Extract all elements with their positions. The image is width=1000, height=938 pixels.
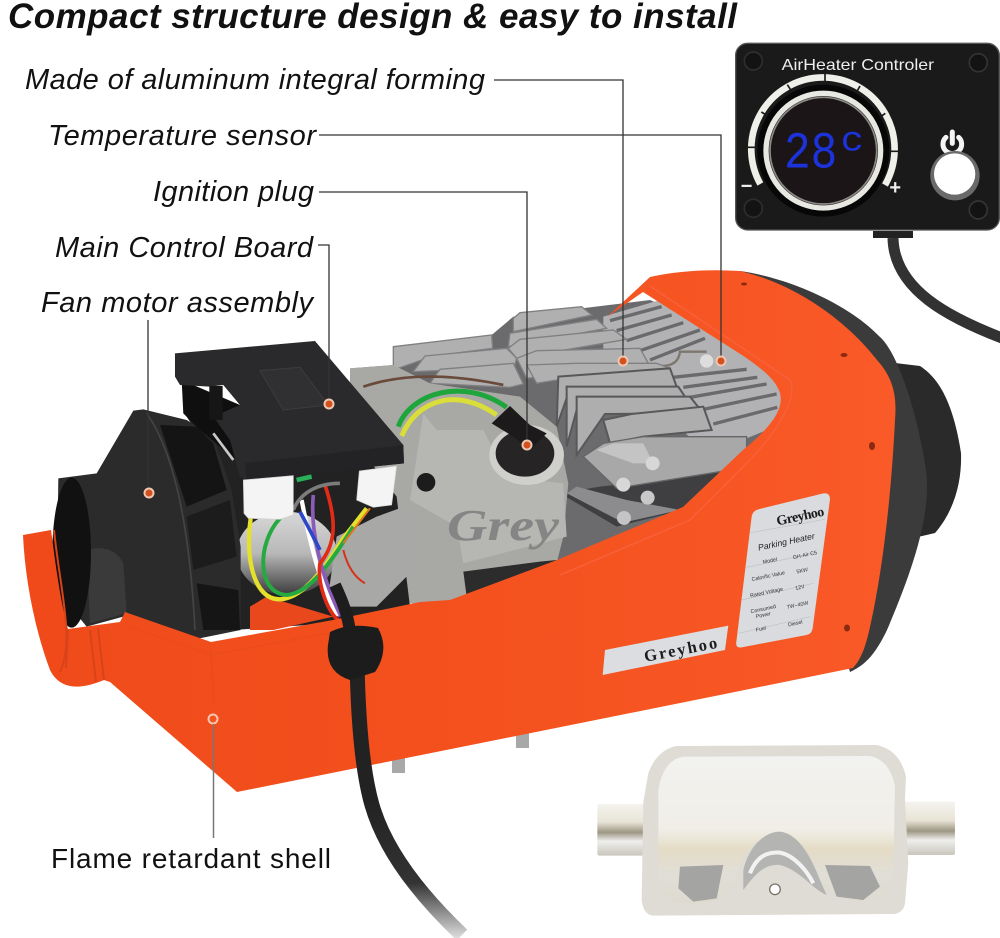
controller panel xyxy=(736,43,999,230)
rating sticker xyxy=(736,493,830,647)
sticker specification text: 5KW xyxy=(796,567,810,575)
dial with temperature display xyxy=(757,85,889,217)
control board cover xyxy=(175,341,404,480)
callout: flame retardant shell xyxy=(51,714,331,874)
sticker specification text: Rated Voltage xyxy=(750,587,784,599)
callout: flame retardant shell: Flame retardant shell xyxy=(51,843,331,874)
opening lip xyxy=(560,286,792,575)
sticker specification text: Diesel xyxy=(788,620,803,628)
minus and plus marks: + xyxy=(889,177,901,199)
engine block xyxy=(350,300,783,603)
sticker specification text: Calorific Value xyxy=(751,570,786,583)
sticker specification text: Parking Heater xyxy=(757,531,817,553)
orange inner shell xyxy=(250,597,333,630)
brand sticker xyxy=(603,626,728,675)
orange flame retardant shell xyxy=(23,270,895,792)
lower motor mount xyxy=(463,560,557,597)
muffler pipes xyxy=(597,802,955,856)
muffler body xyxy=(642,745,908,916)
minus and plus marks: − xyxy=(741,175,752,197)
fan motor housing xyxy=(52,409,241,638)
sticker specification text: Fuel xyxy=(755,626,767,634)
die-cast housing xyxy=(350,365,568,603)
sticker brand: Greyhoo xyxy=(775,505,826,529)
shell holes xyxy=(741,282,875,632)
heater rear outlet xyxy=(895,363,961,540)
shell ridges xyxy=(66,628,104,682)
nozzle ring inner xyxy=(54,530,66,672)
callout: aluminum forming: Made of aluminum integral forming xyxy=(25,64,485,96)
front heat-sink fins xyxy=(557,368,712,455)
mounting hole xyxy=(770,884,780,895)
upper heat-sink fins xyxy=(393,307,670,387)
callout: main control board xyxy=(55,232,334,408)
housing bolt xyxy=(417,473,435,492)
colored wires xyxy=(249,477,370,620)
temperature sensor wire xyxy=(363,377,503,387)
callout: ignition plug xyxy=(153,176,532,450)
dial with temperature display: c xyxy=(841,122,864,162)
sticker specification text: Consumed xyxy=(750,604,777,615)
callout: temperature sensor xyxy=(48,120,726,366)
heater rear black cap xyxy=(740,271,927,672)
sticker specification text: GH-Air C5 xyxy=(792,550,818,561)
dark engine interior xyxy=(350,300,783,603)
callout: fan motor assembly: Fan motor assembly xyxy=(41,287,314,319)
power cable and grommet xyxy=(328,585,462,935)
brand sticker: Greyhoo xyxy=(642,633,719,666)
callout: fan motor assembly xyxy=(41,287,314,498)
controller cable xyxy=(873,231,913,238)
sticker specification text: Model xyxy=(762,557,778,566)
ignition plug grommet xyxy=(489,406,564,485)
callout: temperature sensor: Temperature sensor xyxy=(48,120,317,152)
lower heat-sink arms xyxy=(560,437,747,527)
controller heading: AirHeater Controler xyxy=(782,57,934,74)
sticker specification text: 7W~40W xyxy=(786,600,810,611)
shell fold lines xyxy=(125,625,335,705)
ground wires xyxy=(398,391,507,436)
callout: aluminum forming xyxy=(25,64,628,366)
sticker specification text xyxy=(750,531,818,634)
muffler xyxy=(597,745,955,916)
mounting studs xyxy=(392,730,529,773)
callout: main control board: Main Control Board xyxy=(55,232,314,264)
minus and plus marks xyxy=(741,175,901,199)
power button xyxy=(930,151,980,200)
dial scale arc xyxy=(748,73,899,185)
inner cavity xyxy=(187,417,410,630)
rear heat-sink fins xyxy=(603,300,783,453)
fan and control board assembly xyxy=(52,341,420,638)
dial with temperature display: 28 xyxy=(784,124,837,183)
sticker specification text: Power xyxy=(755,611,772,620)
sticker specification text: 12V xyxy=(795,584,806,592)
watermark: Grey xyxy=(447,501,560,550)
callout: ignition plug: Ignition plug xyxy=(153,176,314,208)
white connectors xyxy=(243,466,397,519)
power symbol xyxy=(943,132,962,154)
motor xyxy=(237,512,337,595)
